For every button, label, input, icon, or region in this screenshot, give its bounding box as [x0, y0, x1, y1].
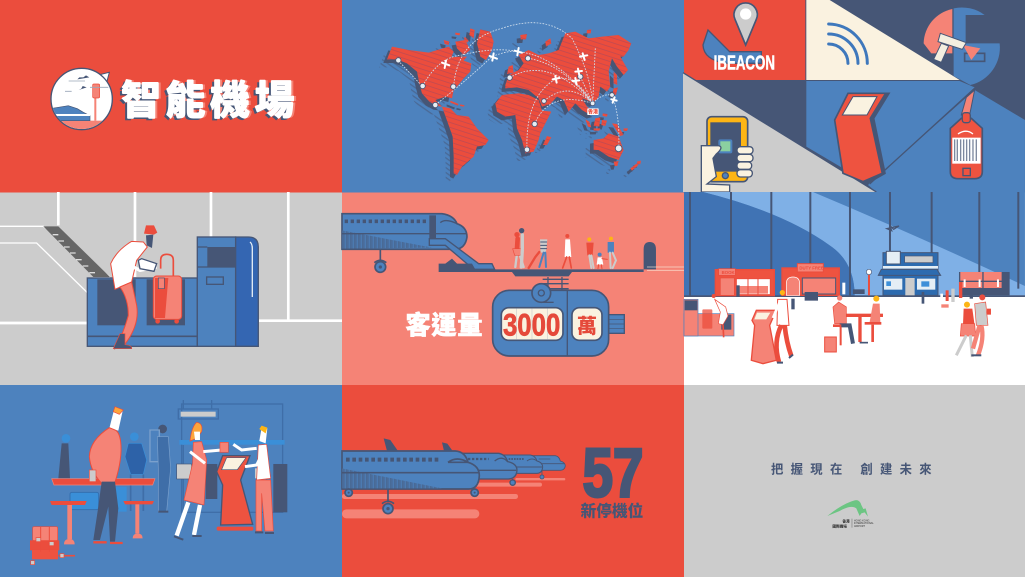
- tagline: 創建未來: [860, 459, 939, 477]
- icon: high table and stools: [50, 479, 155, 544]
- chart: world route map: 香港: [588, 109, 598, 116]
- panel: departure hall background: [0, 385, 342, 577]
- stat: 57 new parking stands: 新停機位: [581, 498, 643, 521]
- panel: check-in background: [0, 192, 342, 385]
- icon: book shop: BOOK: [722, 270, 736, 275]
- icon: iBeacon location pin: [703, 3, 775, 74]
- icon: self check-in kiosk: [217, 456, 253, 531]
- icon: aircraft with stairs: [342, 214, 495, 272]
- panel: aircraft line-up: [342, 436, 643, 521]
- panel: world map background: [342, 0, 684, 192]
- icon: baggage tag with barcode: [950, 90, 982, 179]
- icon: mini bag drop machine: [684, 294, 734, 337]
- icon: self service counters: [959, 272, 1010, 295]
- logo: Hong Kong International Airport: INTERNATIONAL: [854, 522, 874, 525]
- panel: self bag drop scene: [0, 192, 342, 349]
- icon: book shop: [715, 269, 774, 296]
- panel: technology icons background: [684, 0, 1025, 192]
- icon: wifi signal: [829, 24, 867, 63]
- panel: closing background: [684, 385, 1025, 577]
- figure: man at kiosk: [233, 426, 274, 533]
- icon: passenger counter device: [493, 277, 624, 356]
- icon: hand holding smartphone: [701, 117, 753, 192]
- runway streaks: [342, 478, 565, 518]
- panel: title background: [0, 0, 342, 192]
- icon: blue shop: [878, 251, 941, 295]
- icon: duty free shop: DUTY FREE: [799, 266, 824, 271]
- icon: baggage drop machine: [87, 237, 258, 346]
- aircraft: far stand: [529, 456, 565, 479]
- icon: barcode scanner: [924, 7, 1000, 85]
- runway platform: [439, 242, 656, 276]
- icon: tagged backpack: [30, 527, 75, 565]
- figure: traveller at bag drop: [111, 225, 157, 349]
- figures: couple with shopping bag: [956, 294, 991, 357]
- figures: distant people: [736, 282, 973, 309]
- label: passenger throughput: 客運量: [405, 306, 483, 342]
- stat: 57 new parking stands: 57: [583, 436, 643, 512]
- title: smart airport: 智能機場: [121, 68, 299, 126]
- icon: check-in kiosk: [835, 93, 889, 184]
- icon: iBeacon location pin: IBEACON: [714, 52, 775, 74]
- panel: technology icon collage: [683, 0, 1025, 192]
- figures: walking passengers: [513, 230, 616, 269]
- icon: passenger counter device: 萬: [577, 310, 597, 339]
- icon: airport speech bubble logo: [50, 68, 113, 134]
- icon: red suitcase: [153, 254, 182, 324]
- panel: departure hall scene: [30, 400, 287, 565]
- logo: Hong Kong International Airport: [827, 500, 874, 530]
- icon: duty free shop: [782, 264, 839, 295]
- background passengers: [58, 425, 171, 512]
- logo: Hong Kong International Airport: 香港: [842, 518, 850, 524]
- escalator: [43, 226, 110, 277]
- icon: cafe table and seated people: [825, 295, 883, 352]
- aircraft: second stand: [442, 442, 517, 485]
- panel: terminal scene: [684, 192, 1025, 364]
- figure: woman in red dress: [174, 422, 228, 540]
- panel: passenger volume background: [342, 192, 684, 385]
- icon: passenger counter device: 3000: [503, 306, 560, 342]
- aircraft: third stand: [499, 455, 543, 473]
- background check-in counters: [178, 400, 283, 512]
- logo: Hong Kong International Airport: HONG KONG: [854, 519, 870, 522]
- aircraft: front stand: [342, 438, 479, 514]
- icon: kiosk with user: [751, 290, 793, 364]
- logo: Hong Kong International Airport: AIRPORT: [854, 525, 865, 528]
- panel: closing message and logo: [771, 459, 939, 530]
- panel: passenger counter scene: [342, 214, 684, 356]
- luggage under table: [70, 492, 99, 510]
- figure: tall man: [89, 407, 123, 543]
- chart: world route map: [379, 23, 641, 183]
- tagline: 把握現在: [771, 459, 850, 477]
- logo: Hong Kong International Airport: 國際機場: [832, 524, 847, 530]
- panel: parking stands background: [342, 385, 684, 577]
- panel: terminal background: [684, 192, 1025, 385]
- icon: clock post and bench: [853, 269, 872, 295]
